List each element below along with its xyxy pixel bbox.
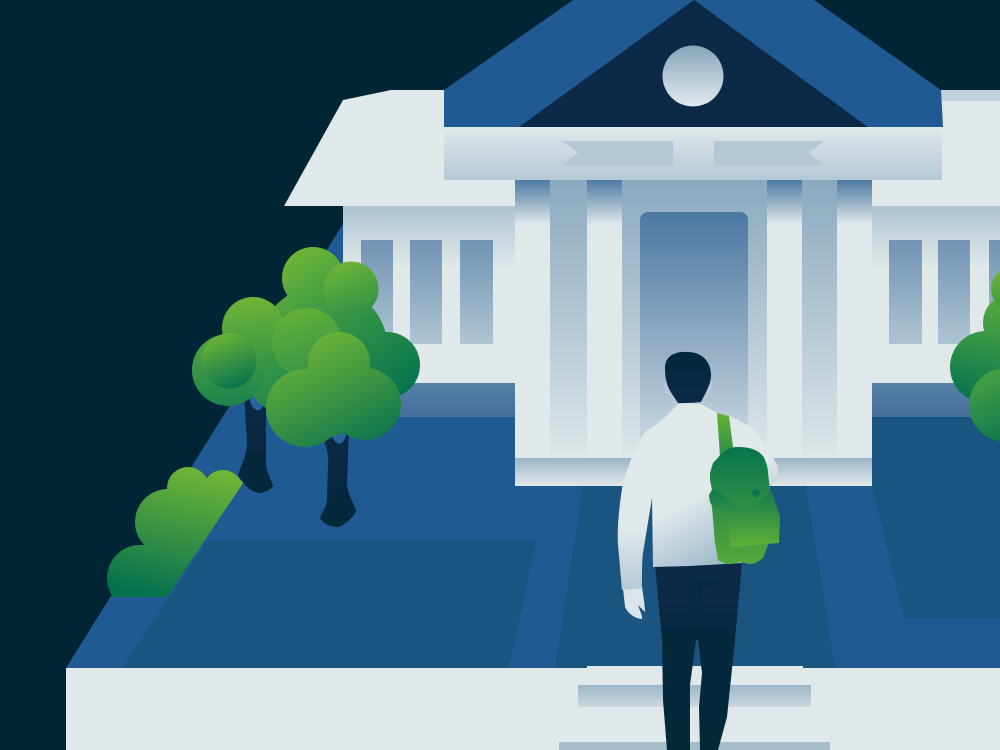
- right wing roof: [872, 90, 1000, 206]
- ground: [66, 224, 1000, 668]
- foreground steps: [66, 666, 1000, 750]
- left wing: [343, 206, 515, 417]
- canopy: right tree: [950, 267, 1000, 442]
- shirt: [646, 403, 778, 567]
- portico plinth: [515, 458, 872, 486]
- right wing: [872, 206, 1000, 417]
- sleeve: [618, 430, 660, 590]
- trunk notch: front tree: [331, 425, 346, 444]
- backpack: [709, 447, 775, 564]
- entablature: [444, 127, 942, 180]
- trunk: back tree: [238, 395, 273, 493]
- central path: [555, 486, 835, 668]
- pediment disc: [662, 46, 724, 106]
- backpack flap: [709, 490, 780, 547]
- backpack strap: [717, 413, 733, 456]
- student: [618, 352, 780, 750]
- canopy: front tree: [266, 332, 401, 447]
- portico interior: [550, 180, 837, 460]
- hair: [665, 352, 711, 403]
- left lawn: [122, 541, 536, 668]
- hand: [623, 586, 645, 619]
- pediment triangle: [519, 0, 868, 127]
- columns: [515, 180, 872, 460]
- legs: [655, 562, 742, 750]
- left wing roof: [284, 90, 515, 206]
- main roof: [444, 0, 943, 127]
- trunk notch: back tree: [249, 396, 266, 410]
- door: [640, 212, 748, 462]
- bush: [107, 467, 243, 611]
- backpack button: [752, 489, 760, 497]
- trunk: front tree: [320, 430, 356, 527]
- canopy: back tree: [192, 247, 420, 415]
- right lawn: [872, 417, 1000, 618]
- neck and ears: [664, 380, 712, 408]
- trouser crease: [687, 579, 723, 628]
